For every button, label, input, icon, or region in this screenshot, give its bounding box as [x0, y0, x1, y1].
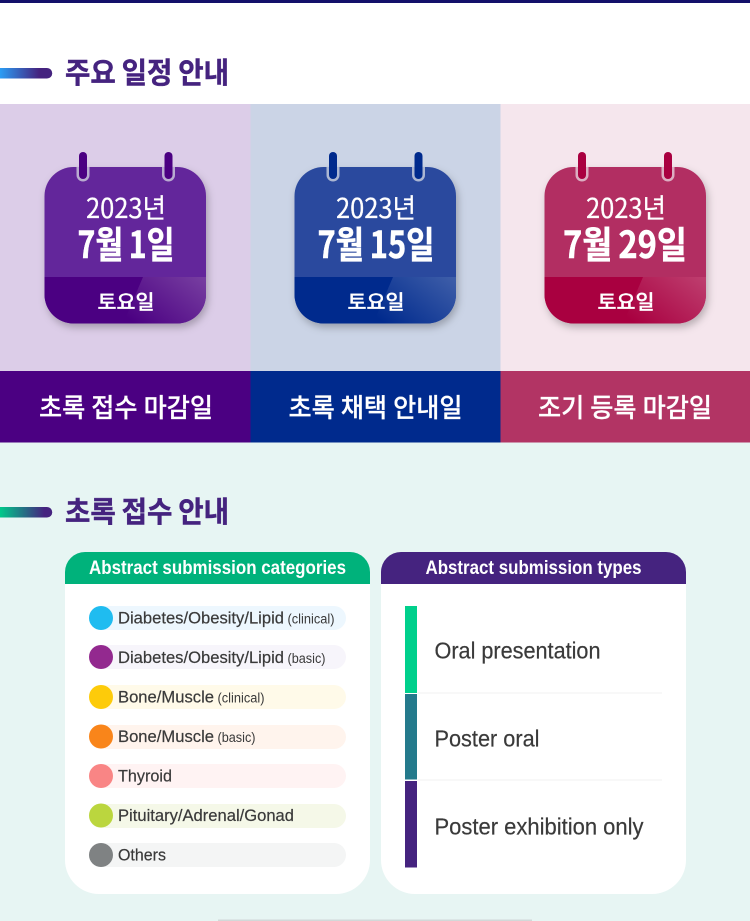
type: Poster oral: [405, 694, 540, 780]
category: Pituitary/Adrenal/Gonad: Pituitary/Adrenal/Gonad: [118, 807, 294, 825]
icon: calendar July 1: 토요일: [98, 286, 154, 315]
category: Others: Others: [118, 846, 166, 864]
type: Poster exhibition only: [405, 781, 644, 868]
panel: abstract submission categories: [65, 552, 370, 894]
icon: calendar July 15: [294, 152, 457, 324]
icon: calendar July 29: 2023년: [586, 187, 666, 226]
category: Diabetes/Obesity/Lipid clinical: [89, 606, 346, 630]
category: Bone/Muscle clinical: (clinical): [218, 690, 264, 706]
type: Oral presentation: [405, 606, 600, 693]
category: Bone/Muscle clinical: Bone/Muscle: [118, 688, 214, 706]
category: Bone/Muscle clinical: [89, 685, 346, 709]
top navy bar: [0, 0, 750, 3]
section background: [0, 442, 750, 921]
category: Diabetes/Obesity/Lipid clinical: Diabetes/Obesity/Lipid: [118, 610, 284, 628]
label band: abstract deadline: [0, 371, 250, 442]
icon: calendar July 15: 7월 15일: [318, 215, 434, 269]
category: Diabetes/Obesity/Lipid basic: (basic): [288, 651, 326, 666]
icon: calendar July 1: [44, 152, 207, 324]
heading: abstract submission: 초록 접수 안내: [65, 489, 229, 531]
icon: calendar July 15: 2023년: [336, 187, 416, 226]
panel: schedule 2: [250, 104, 500, 371]
category: Diabetes/Obesity/Lipid basic: [89, 645, 346, 669]
category: Thyroid: Thyroid: [118, 768, 172, 786]
type: Oral presentation: Oral presentation: [434, 638, 600, 664]
category: Others: [89, 843, 346, 867]
card header: categories: Abstract submission categories: [89, 558, 346, 579]
category: Diabetes/Obesity/Lipid basic: Diabetes/Obesity/Lipid: [118, 649, 284, 667]
heading: key schedule: [0, 50, 229, 92]
icon: calendar July 1: 7월 1일: [78, 215, 174, 269]
icon: calendar July 29: [544, 152, 707, 324]
heading: key schedule: 주요 일정 안내: [65, 50, 229, 92]
type: Poster oral: Poster oral: [434, 726, 540, 752]
card header: categories: [65, 552, 370, 584]
icon: calendar July 15: 토요일: [348, 286, 404, 315]
label band: abstract deadline: 초록 접수 마감일: [39, 388, 213, 425]
panel: abstract submission types: [381, 552, 686, 894]
icon: calendar July 29: 토요일: [598, 286, 654, 315]
heading: abstract submission: [0, 489, 229, 531]
panel: schedule 3: [500, 104, 750, 371]
category: Diabetes/Obesity/Lipid clinical: (clinical): [288, 612, 334, 626]
label band: acceptance notice: 초록 채택 안내일: [288, 388, 462, 425]
card header: types: Abstract submission types: [426, 558, 642, 579]
category: Thyroid: [89, 764, 346, 788]
card header: types: [381, 552, 686, 584]
icon: calendar July 29: 7월 29일: [563, 215, 687, 269]
category: Bone/Muscle basic: [89, 724, 346, 749]
icon: calendar July 1: 2023년: [86, 187, 166, 226]
type: Poster exhibition only: Poster exhibition only: [434, 814, 644, 840]
category: Bone/Muscle basic: (basic): [218, 730, 256, 745]
label band: early registration deadline: [500, 371, 750, 442]
label band: early registration deadline: 조기 등록 마감일: [538, 388, 712, 425]
category: Pituitary/Adrenal/Gonad: [89, 804, 346, 828]
category: Bone/Muscle basic: Bone/Muscle: [118, 728, 214, 746]
panel: schedule 1: [0, 104, 250, 371]
label band: acceptance notice: [250, 371, 500, 442]
